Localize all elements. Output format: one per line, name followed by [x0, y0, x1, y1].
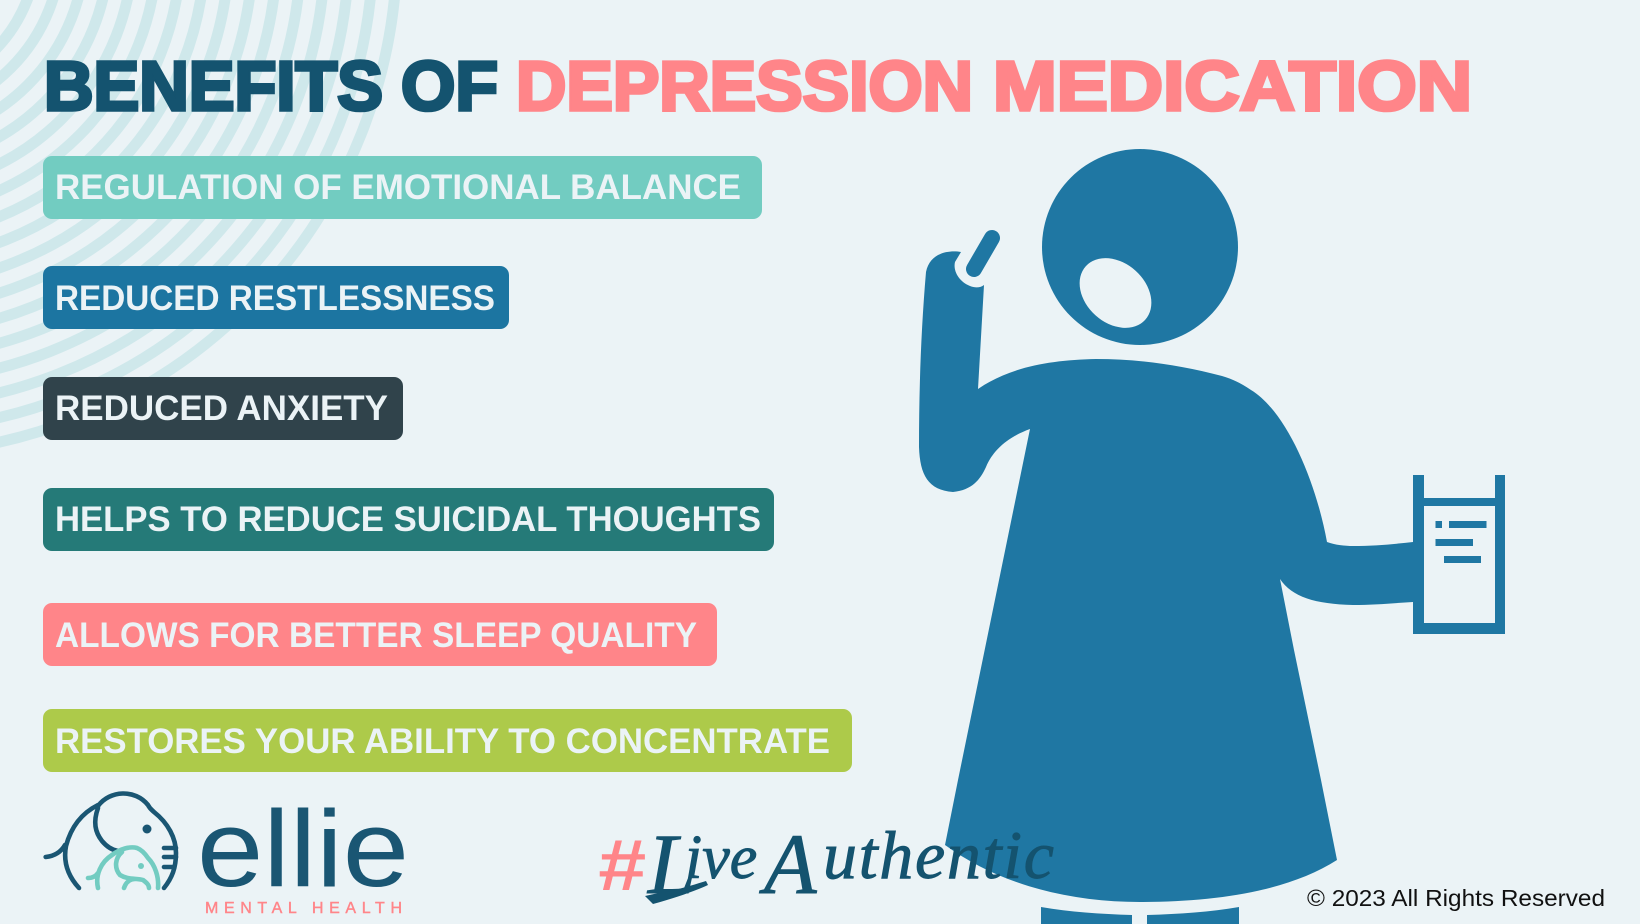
pill — [974, 238, 992, 269]
benefit bar: anxiety: REDUCED ANXIETY — [55, 389, 388, 428]
head — [1042, 149, 1238, 345]
benefit bar: sleep quality: ALLOWS FOR BETTER SLEEP QUALITY — [55, 616, 697, 655]
benefit bar: concentration — [43, 709, 852, 772]
benefit bar: suicidal thoughts: HELPS TO REDUCE SUICIDAL THOUGHTS — [55, 500, 761, 539]
open mouth — [1066, 244, 1165, 342]
hashtag: #LiveAuthentic — [597, 816, 1056, 912]
copyright: © 2023 All Rights Reserved — [1307, 885, 1605, 911]
benefit bar: emotional balance — [43, 156, 762, 219]
benefit bar: restlessness — [43, 266, 509, 329]
medicine bottle — [1413, 475, 1505, 634]
title: OF — [401, 47, 498, 125]
title: DEPRESSION — [516, 47, 973, 125]
benefit bar: restlessness: REDUCED RESTLESSNESS — [55, 279, 495, 318]
hashtag: #LiveAuthentic: # — [597, 826, 645, 906]
benefit bar: emotional balance: REGULATION OF EMOTIONAL BALANCE — [55, 168, 741, 207]
hashtag: #LiveAuthentic: ive — [685, 824, 757, 892]
title: MEDICATION — [993, 47, 1472, 125]
logo: ellie wordmark: MENTAL HEALTH — [205, 900, 402, 917]
benefit bar: sleep quality — [43, 603, 717, 666]
benefit bar: anxiety — [43, 377, 403, 440]
title — [44, 47, 1472, 125]
title: BENEFITS — [44, 47, 383, 125]
body and arms — [919, 251, 1413, 902]
illustration: person taking a pill and holding a medicine bottle — [919, 149, 1505, 924]
hashtag: #LiveAuthentic: L — [646, 816, 696, 912]
hashtag: #LiveAuthentic: A — [759, 816, 817, 912]
benefit bar: suicidal thoughts — [43, 488, 774, 551]
logo: ellie elephant icon — [46, 793, 176, 888]
benefit bar: concentration: RESTORES YOUR ABILITY TO CONCENTRATE — [55, 722, 830, 761]
hashtag: #LiveAuthentic: uthentic — [823, 817, 1056, 893]
legs — [1041, 907, 1239, 924]
logo: ellie wordmark: ellie — [197, 788, 409, 910]
